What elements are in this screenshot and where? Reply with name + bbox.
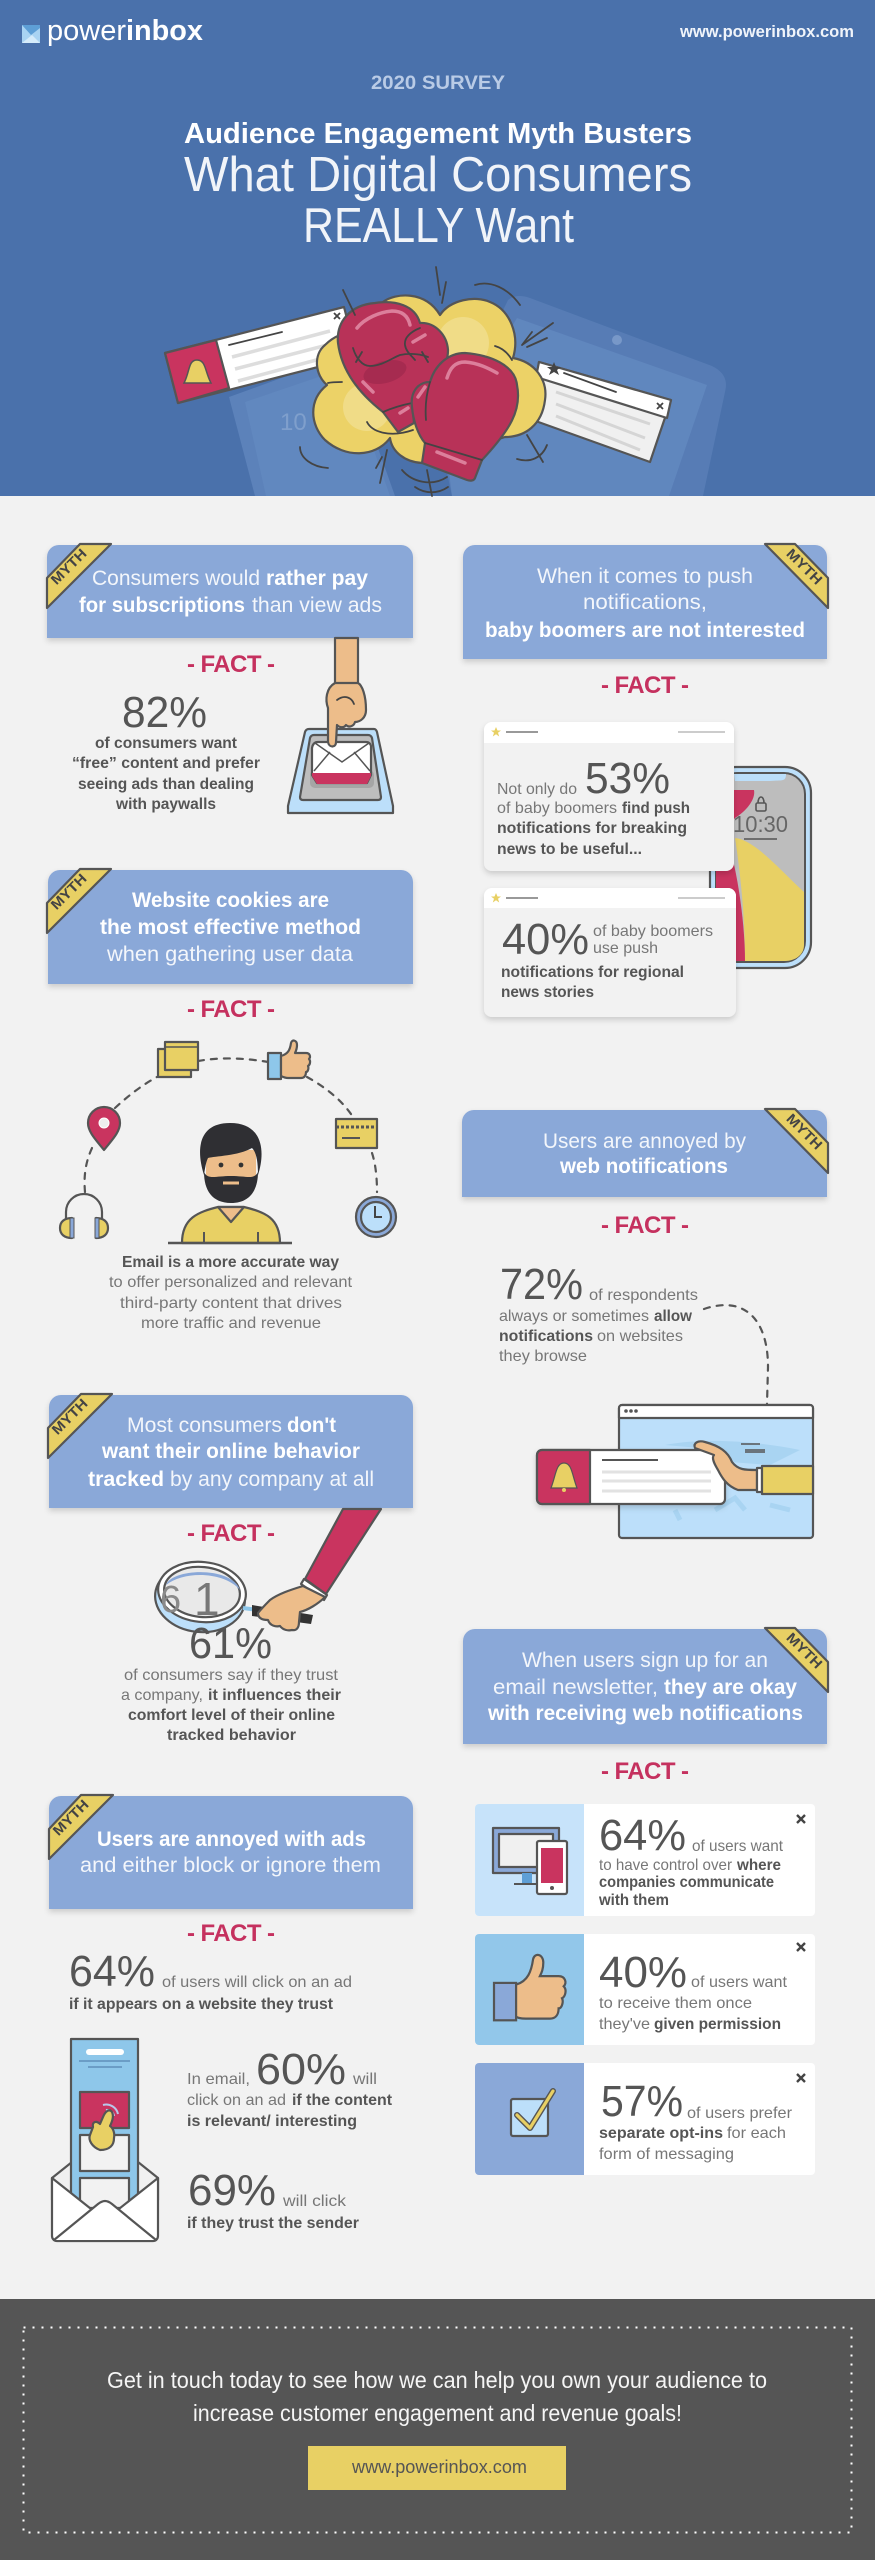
card: 64% control: where <box>736 1857 781 1874</box>
myth banner: Most consumers <box>127 1414 282 1437</box>
card: 64% control: to have control over <box>599 1857 733 1874</box>
fact text: email <box>109 1254 353 1332</box>
fact text: email: third-party content that drives <box>120 1295 342 1312</box>
myth banner: When it comes to push <box>537 565 753 588</box>
illustration: boxing gloves <box>338 302 518 481</box>
myth ribbon: MYTH <box>783 1629 826 1672</box>
myth ribbon <box>47 869 111 933</box>
dashed arc <box>85 1058 377 1192</box>
cta button <box>308 2446 566 2490</box>
myth banner: email newsletter, <box>493 1676 658 1699</box>
logo: inbox <box>126 15 203 47</box>
panel: myth 4 web notifications <box>462 1109 828 1538</box>
notification card: 53% <box>484 722 734 871</box>
panel: myth 3 website cookies <box>47 869 413 1332</box>
stat: 60%: In email, <box>187 2071 250 2088</box>
notification card: 40%: news stories <box>501 984 594 1001</box>
stat: 64%: 64% <box>69 1947 155 1996</box>
stat: 72%: they browse <box>499 1348 587 1365</box>
illustration: right notification <box>530 362 671 462</box>
diagram: dashed arc of data icons <box>60 1041 396 1243</box>
notification card: 53%: find push <box>622 800 690 817</box>
stat: 82%: 82% <box>122 688 207 737</box>
illustration: browser with notification <box>537 1405 813 1538</box>
card: 57% opt-ins: separate opt-ins <box>599 2125 723 2142</box>
stat: 82%: of consumers want <box>95 735 238 752</box>
myth banner: than view ads <box>252 594 382 617</box>
illustration: ghost devices: 10 <box>280 409 307 436</box>
icon: thumbs up <box>268 1041 310 1079</box>
icon: hand tapping tablet <box>288 638 393 813</box>
stat: 72%: of respondents <box>589 1287 698 1304</box>
panel: myth 6 newsletter <box>463 1628 828 2175</box>
notification card: 53%: 53% <box>585 754 670 803</box>
stat: 64%: of users will click on an ad <box>162 1974 352 1991</box>
myth ribbon <box>765 544 828 608</box>
myth banner: with receiving web notifications <box>487 1702 803 1725</box>
cta button: www.powerinbox.com <box>351 2457 527 2477</box>
fact text: email: Email is a more accurate way <box>122 1254 339 1271</box>
stat: 82% <box>72 688 260 813</box>
card: 64% control: of users want <box>692 1838 784 1855</box>
notification card: 53%: Not only do <box>497 781 577 798</box>
stat: 72%: allow <box>654 1308 693 1325</box>
title <box>184 118 692 253</box>
fact label: - FACT - <box>187 996 275 1023</box>
close icon <box>797 2074 805 2082</box>
fact text: email: more traffic and revenue <box>141 1315 321 1332</box>
fact label: - FACT - <box>187 1920 275 1947</box>
panel: myth 5 online behaviour <box>48 1394 413 1744</box>
stat: 69%: will click <box>282 2193 347 2210</box>
icon: clock <box>356 1197 396 1237</box>
myth banner: by any company at all <box>170 1468 374 1491</box>
fact label: - FACT - <box>601 1758 689 1785</box>
stat: 69%: 69% <box>188 2166 276 2215</box>
stat: 72%: always or sometimes <box>499 1308 649 1325</box>
myth banner <box>49 1796 413 1909</box>
myth ribbon: MYTH <box>47 870 90 913</box>
myth ribbon: MYTH <box>47 545 90 588</box>
icon: thumbs up <box>494 1955 566 2020</box>
stat: 72% <box>499 1260 698 1365</box>
stat: 61%: of consumers say if they trust <box>124 1667 339 1684</box>
panel: myth 7 ads <box>49 1795 413 2241</box>
myth ribbon <box>765 1109 828 1173</box>
stat: 60%: click on an ad <box>187 2092 286 2109</box>
card: 40% permission: they've <box>599 2016 650 2033</box>
notification card: 40%: of baby boomers <box>593 923 713 940</box>
illustration: left notification <box>165 307 357 403</box>
stat: 82%: with paywalls <box>115 796 216 813</box>
fact label: - FACT - <box>187 651 275 678</box>
myth banner: Website cookies are <box>132 889 329 912</box>
myth banner <box>463 545 827 659</box>
card: 64% control: with them <box>598 1892 669 1909</box>
card: 40% permission <box>475 1934 815 2045</box>
myth banner <box>48 870 413 984</box>
stat: 61%: a company, <box>121 1687 203 1704</box>
survey label: 2020 SURVEY <box>371 73 505 94</box>
myth banner: web notifications <box>559 1155 728 1178</box>
myth banner: tracked <box>88 1468 164 1491</box>
illustration: hand with magnifier: 6 <box>160 1579 181 1621</box>
myth ribbon: MYTH <box>783 1110 826 1153</box>
panel: myth 1 subscriptions <box>47 544 413 813</box>
title: What Digital Consumers <box>184 148 692 202</box>
card: 40% permission: given permission <box>654 2016 781 2033</box>
card: 57% opt-ins: of users prefer <box>687 2105 793 2122</box>
myth ribbon <box>47 544 111 608</box>
myth ribbon <box>49 1795 113 1859</box>
myth banner <box>49 1395 413 1508</box>
myth ribbon: MYTH <box>48 1395 91 1438</box>
myth banner: when gathering user data <box>106 943 353 966</box>
myth banner: don't <box>287 1414 336 1437</box>
panel: header hero <box>0 0 875 496</box>
cta text: Get in touch today to see how we can help you own your audience to <box>107 2367 767 2393</box>
notification card: 53%: of baby boomers <box>497 800 617 817</box>
illustration: explosion cloud <box>313 295 545 463</box>
notification card: 40%: 40% <box>502 915 589 964</box>
stat: 64% <box>69 1947 352 2013</box>
icon: location pin <box>88 1107 120 1150</box>
illustration: phone: 10:30 <box>733 811 788 837</box>
card: 57% opt-ins <box>475 2063 815 2175</box>
fact label: - FACT - <box>187 1520 275 1547</box>
close icon <box>797 1815 805 1823</box>
stat: 61%: tracked behavior <box>167 1727 296 1744</box>
stat: 60%: is relevant/ interesting <box>187 2113 357 2130</box>
card: 57% opt-ins: form of messaging <box>599 2146 734 2163</box>
card: 40% permission: 40% <box>599 1948 687 1997</box>
stat: 64%: if it appears on a website they trust <box>69 1996 334 2013</box>
stat: 72%: 72% <box>500 1260 583 1309</box>
illustration: bearded person <box>168 1123 292 1243</box>
stat: 69% <box>187 2166 359 2232</box>
card: 64% control: companies communicate <box>599 1874 774 1891</box>
logo <box>22 15 203 47</box>
myth banner: Users are annoyed by <box>543 1130 746 1153</box>
myth banner: baby boomers are not interested <box>485 619 805 642</box>
website link: www.powerinbox.com <box>679 22 854 41</box>
myth banner <box>463 1629 827 1744</box>
myth banner: Users are annoyed with ads <box>97 1828 366 1851</box>
panel: myth 2 baby boomers <box>463 544 828 1017</box>
myth banner: rather pay <box>266 567 368 590</box>
stat: 72%: notifications <box>499 1328 593 1345</box>
stat: 61% <box>121 1619 341 1744</box>
card: 64% control <box>475 1804 815 1916</box>
illustration: email with clickable ad <box>52 2039 158 2241</box>
myth banner: the most effective method <box>100 916 361 939</box>
notification card: 40%: use push <box>593 940 658 957</box>
stat: 61%: comfort level of their online <box>128 1707 335 1724</box>
myth banner: for subscriptions <box>79 594 245 617</box>
notification card: 53%: notifications for breaking <box>497 820 687 837</box>
close icon <box>797 1943 805 1951</box>
icon: checkbox <box>511 2091 553 2136</box>
myth banner: notifications, <box>583 591 707 614</box>
illustration: phone <box>710 767 811 968</box>
card: 40% permission: of users want <box>691 1974 788 1991</box>
cta text: increase customer engagement and revenue goals! <box>193 2400 682 2426</box>
stat: 60% <box>187 2045 393 2130</box>
icon: windows <box>158 1042 198 1077</box>
card: 57% opt-ins: 57% <box>601 2077 683 2126</box>
myth banner <box>47 545 413 638</box>
card: 57% opt-ins: for each <box>727 2125 786 2142</box>
logo: power <box>47 15 126 47</box>
stat: 60%: will <box>352 2071 377 2088</box>
card: 40% permission: to receive them once <box>599 1995 752 2012</box>
myth banner: want their online behavior <box>101 1440 360 1463</box>
illustration: ghost devices <box>229 296 726 496</box>
myth banner: Consumers would <box>92 567 260 590</box>
myth banner <box>462 1110 827 1197</box>
myth ribbon <box>765 1628 828 1692</box>
illustration: hand with magnifier: 1 <box>194 1573 220 1625</box>
myth banner: and either block or ignore them <box>80 1854 381 1877</box>
myth ribbon: MYTH <box>783 545 826 588</box>
fact text: email: to offer personalized and relevant <box>109 1274 353 1291</box>
stat: 82%: seeing ads than dealing <box>78 776 254 793</box>
myth ribbon <box>48 1394 112 1458</box>
stat: 82%: “free” content and prefer <box>72 755 260 772</box>
myth banner: they are okay <box>664 1676 797 1699</box>
stat: 69%: if they trust the sender <box>187 2215 359 2232</box>
panel: footer call to action <box>0 2299 875 2560</box>
myth banner: When users sign up for an <box>522 1649 768 1672</box>
icon: credit card <box>336 1119 377 1148</box>
illustration: action lines <box>300 267 553 496</box>
title: REALLY Want <box>303 199 574 253</box>
fact label: - FACT - <box>601 672 689 699</box>
stat: 61%: it influences their <box>208 1687 341 1704</box>
fact label: - FACT - <box>601 1212 689 1239</box>
cta text <box>107 2367 767 2426</box>
dashed connector <box>704 1305 768 1404</box>
stat: 60%: if the content <box>292 2092 393 2109</box>
myth ribbon: MYTH <box>49 1796 92 1839</box>
stat: 61%: 61% <box>189 1619 272 1668</box>
stat: 72%: on websites <box>597 1328 683 1345</box>
notification card: 40%: notifications for regional <box>501 964 684 981</box>
icon: headphones <box>60 1194 108 1238</box>
stat: 60%: 60% <box>256 2045 346 2094</box>
card: 64% control: 64% <box>599 1811 686 1860</box>
notification card: 40% <box>484 888 736 1017</box>
notification card: 53%: news to be useful... <box>497 841 642 858</box>
icon: monitor and phone <box>493 1828 567 1894</box>
title: Audience Engagement Myth Busters <box>184 118 692 150</box>
illustration: hand with magnifier <box>152 1509 381 1637</box>
